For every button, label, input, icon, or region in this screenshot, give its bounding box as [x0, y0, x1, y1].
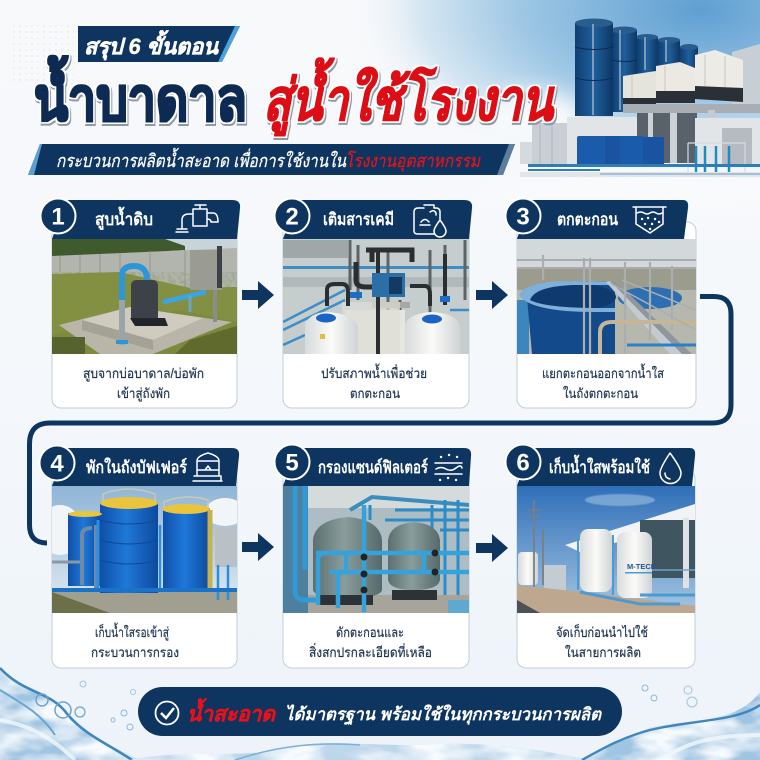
description: ปรับสภาพน้ำเพื่อช่วย — [321, 363, 427, 381]
description: สิ่งสกปรกละเอียดที่เหลือ — [309, 643, 432, 660]
icon: chemical container — [414, 205, 446, 237]
description: ตกตะกอน — [350, 386, 400, 401]
step number: 3 — [516, 204, 530, 230]
arrow: step 4 to 5 — [242, 533, 274, 561]
step number: 1 — [51, 204, 65, 230]
header bar — [40, 198, 240, 239]
step heading: เติมสารเคมี — [323, 209, 394, 229]
description — [321, 363, 427, 401]
panel: step 5 — [274, 444, 471, 668]
water splash: left — [0, 668, 140, 760]
step number — [506, 444, 540, 480]
header bar — [274, 444, 471, 486]
photo: sand filters — [283, 486, 469, 613]
panel: step 2 — [274, 198, 472, 408]
step heading: สูบน้ำดิบ — [95, 206, 153, 231]
description: เก็บน้ำใสรอเข้าสู่ — [95, 622, 169, 641]
icon: check circle — [156, 702, 178, 724]
step number — [274, 198, 310, 234]
step number — [506, 198, 540, 234]
flow connector from step 3 to step 4 — [30, 296, 731, 543]
banner emphasis: น้ำสะอาด — [187, 698, 276, 726]
description: ในสายการผลิต — [565, 644, 641, 660]
header bar — [274, 198, 472, 239]
photo: well pump — [52, 239, 237, 354]
step number: 4 — [50, 450, 64, 478]
description — [309, 625, 432, 660]
description: เข้าสู่ถังพัก — [117, 386, 170, 402]
header bar — [506, 198, 688, 239]
icon: pump valve — [176, 205, 218, 232]
water splash: right — [580, 685, 760, 760]
description — [556, 623, 648, 660]
description: แยกตะกอนออกจากน้ำใส — [542, 363, 664, 381]
subtitle banner: โรงงานอุตสาหกรรม — [345, 150, 481, 172]
step heading: เก็บน้ำใสพร้อมใช้ — [549, 454, 650, 477]
photo: chemical dosing — [283, 239, 469, 354]
description — [542, 363, 664, 401]
tag: summary 6 steps — [78, 26, 240, 62]
step heading: กรองแซนด์ฟิลเตอร์ — [318, 457, 429, 477]
water splash: middle — [130, 743, 590, 760]
photo: buffer tanks — [52, 486, 237, 613]
title: น้ำบาดาล — [34, 55, 247, 133]
panel: step 4 — [38, 446, 245, 668]
bottom banner — [138, 687, 622, 736]
step number: 5 — [285, 450, 299, 476]
photo: clear water tanks — [517, 486, 695, 613]
step number: 2 — [285, 204, 299, 230]
arrow: step 2 to 3 — [476, 281, 508, 309]
step heading: พักในถังบัฟเฟอร์ — [86, 457, 188, 477]
description: กระบวนการกรอง — [91, 645, 179, 660]
factory photo — [520, 18, 760, 177]
arrow: step 5 to 6 — [476, 534, 508, 562]
photo: clear water tanks: M-TECH — [627, 562, 656, 571]
icon: settling tank — [633, 207, 666, 233]
panel: step 1 — [40, 198, 240, 408]
icon: storage tank — [193, 453, 222, 481]
title — [34, 55, 555, 137]
description: ดักตะกอนและ — [336, 625, 404, 640]
step number — [40, 198, 76, 234]
description: จัดเก็บก่อนนำไปใช้ — [556, 623, 648, 640]
step heading: ตกตะกอน — [557, 210, 618, 229]
step number — [274, 444, 310, 480]
arrow: step 1 to 2 — [242, 281, 274, 309]
tag: summary 6 steps: สรุป 6 ขั้นตอน — [84, 30, 219, 61]
icon: water drop — [660, 453, 681, 484]
panel: step 6 — [506, 444, 695, 668]
subtitle banner — [28, 144, 515, 175]
header bar — [40, 446, 239, 486]
icon: filter layers — [435, 455, 462, 480]
description — [83, 366, 204, 402]
step number: 6 — [516, 450, 530, 476]
photo: sedimentation tank — [517, 239, 696, 354]
step number — [40, 446, 74, 480]
description: ในถังตกตะกอน — [563, 385, 638, 401]
panel: step 3 — [506, 198, 696, 408]
header bar — [506, 444, 695, 486]
title: สู่น้ำใช้โรงงาน — [263, 57, 555, 137]
subtitle banner: กระบวนการผลิตน้ำสะอาด เพื่อการใช้งานใน — [56, 147, 347, 171]
banner text: ได้มาตรฐาน พร้อมใช้ในทุกกระบวนการผลิต — [285, 704, 602, 726]
description — [91, 622, 179, 660]
description: สูบจากบ่อบาดาล/บ่อพัก — [83, 366, 204, 382]
